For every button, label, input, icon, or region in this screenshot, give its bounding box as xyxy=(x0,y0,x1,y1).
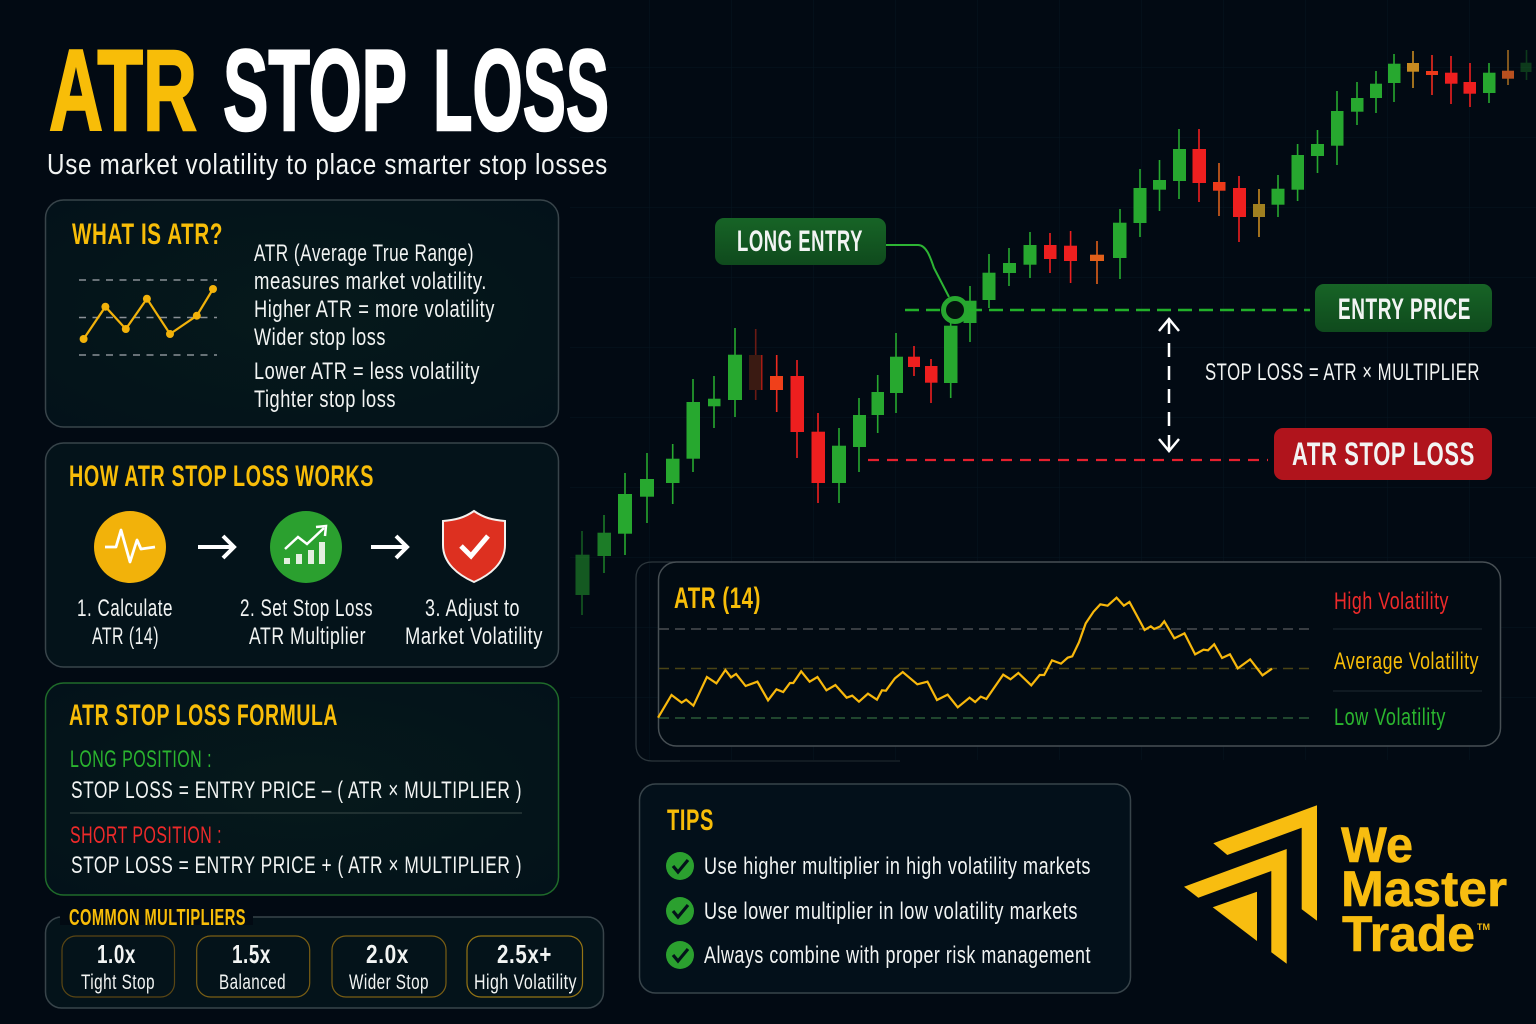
tip 1: Use higher multiplier in high volatility markets xyxy=(704,853,1091,880)
title xyxy=(49,27,609,155)
long formula: STOP LOSS = ENTRY PRICE – ( ATR × MULTIPLIER ) xyxy=(71,777,522,804)
volatility level lines xyxy=(659,629,1313,718)
panel: how ATR stop loss works xyxy=(46,443,558,667)
subtitle: Use market volatility to place smarter stop losses xyxy=(47,149,608,181)
ATR definition text: Wider stop loss xyxy=(254,324,386,351)
logo wordmark: We xyxy=(1341,817,1413,873)
tip 2 xyxy=(666,897,1078,925)
logo wordmark: Master xyxy=(1341,861,1507,917)
step labels: ATR (14) xyxy=(92,623,159,650)
short formula: SHORT POSITION : xyxy=(70,822,222,849)
panel: formula xyxy=(46,683,558,895)
long formula: LONG POSITION : xyxy=(70,746,212,773)
arrow: step 2 to 3 xyxy=(371,536,407,558)
ATR definition text: Higher ATR = more volatility xyxy=(254,296,495,323)
callout: long entry: LONG ENTRY xyxy=(737,225,863,258)
title: STOP xyxy=(223,27,407,155)
volatility labels: High Volatility xyxy=(1334,588,1449,615)
ATR definition text: ATR (Average True Range) xyxy=(254,240,474,267)
chip: 1.5x xyxy=(197,936,310,997)
step labels: 1. Calculate xyxy=(77,595,173,622)
title: ATR xyxy=(49,27,197,155)
logo wordmark: Trade xyxy=(1342,906,1475,962)
label: entry price xyxy=(1315,284,1492,332)
mini ATR line chart xyxy=(79,280,217,355)
indicator title: ATR (14) xyxy=(674,582,761,615)
stop loss dashed line xyxy=(868,459,1268,461)
tip 2: Use lower multiplier in low volatility markets xyxy=(704,898,1078,925)
panel: common multipliers xyxy=(46,904,604,1008)
chip: 2.0x xyxy=(332,936,446,997)
ATR definition text: Lower ATR = less volatility xyxy=(254,358,480,385)
arrow: distance between entry and stop xyxy=(1159,319,1179,451)
volatility labels: Average Volatility xyxy=(1334,648,1479,675)
logo wordmark xyxy=(1341,817,1507,962)
step labels: Market Volatility xyxy=(405,623,543,650)
tip 3: Always combine with proper risk management xyxy=(704,942,1091,969)
chip: 1.5x: 1.5x xyxy=(232,939,271,969)
long formula xyxy=(70,746,522,804)
heading: tips: TIPS xyxy=(667,804,714,837)
icon: logo chevrons xyxy=(1184,805,1317,964)
chip: 2.5x+: 2.5x+ xyxy=(497,939,552,969)
logo: We Master Trade xyxy=(1184,805,1507,964)
dark candle xyxy=(749,329,762,400)
chip: 1.0x xyxy=(62,936,174,997)
heading: formula: ATR STOP LOSS FORMULA xyxy=(69,699,338,732)
entry price dashed line xyxy=(905,309,1310,311)
tip 1 xyxy=(666,852,1091,880)
step labels: ATR Multiplier xyxy=(249,623,366,650)
short formula xyxy=(70,822,522,879)
step labels: 2. Set Stop Loss xyxy=(240,595,373,622)
step labels xyxy=(77,595,543,650)
chip: 2.0x: Wider Stop xyxy=(349,971,429,994)
panel: ATR (14) indicator xyxy=(636,562,1500,761)
panel: tips xyxy=(640,784,1130,993)
logo wordmark: TM xyxy=(1477,922,1490,932)
chip: 2.5x+ xyxy=(467,936,582,997)
ATR definition text: measures market volatility. xyxy=(254,268,487,295)
title: LOSS xyxy=(433,27,609,155)
icon: growth chart in green circle xyxy=(270,511,342,583)
heading: multipliers: COMMON MULTIPLIERS xyxy=(69,904,246,930)
candlestick chart xyxy=(576,50,1532,615)
ATR definition text xyxy=(254,240,495,413)
panel: what is ATR xyxy=(46,200,558,427)
entry marker xyxy=(944,298,966,322)
volatility labels xyxy=(1334,588,1479,731)
callout: long entry xyxy=(715,218,949,297)
heading: what is ATR: WHAT IS ATR? xyxy=(72,218,223,251)
arrow: step 1 to 2 xyxy=(198,536,234,558)
ATR definition text: Tighter stop loss xyxy=(254,386,396,413)
tip 3 xyxy=(666,941,1091,969)
chip: 2.0x: 2.0x xyxy=(366,939,409,969)
chip: 1.5x: Balanced xyxy=(219,971,286,994)
step labels: 3. Adjust to xyxy=(425,595,520,622)
heading: how it works: HOW ATR STOP LOSS WORKS xyxy=(69,460,374,493)
label: ATR stop loss xyxy=(1274,428,1492,480)
ATR line xyxy=(658,598,1272,718)
icon: pulse in yellow circle xyxy=(94,511,166,583)
chip: 1.0x: Tight Stop xyxy=(81,971,155,994)
chip: 2.5x+: High Volatility xyxy=(474,971,577,994)
volatility labels: Low Volatility xyxy=(1334,704,1446,731)
icon: shield with check xyxy=(443,511,505,582)
chip: 1.0x: 1.0x xyxy=(97,939,136,969)
short formula: STOP LOSS = ENTRY PRICE + ( ATR × MULTIPLIER ) xyxy=(71,852,522,879)
